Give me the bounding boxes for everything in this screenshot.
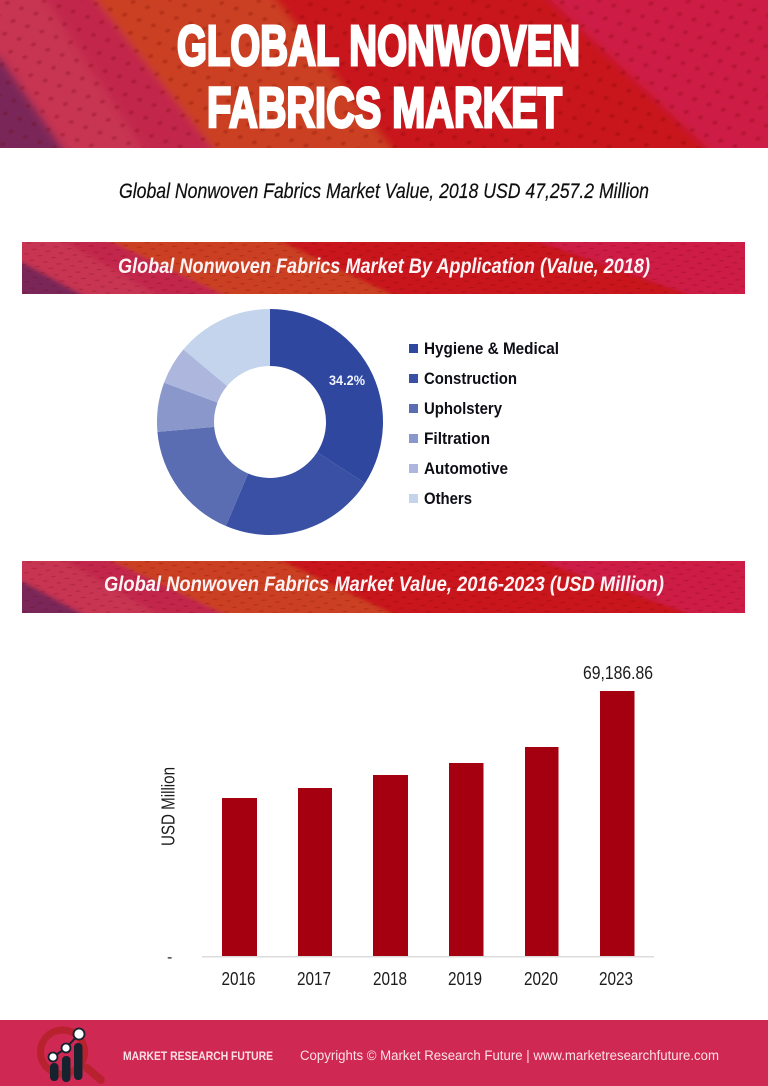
section heading: by application: Global Nonwoven Fabrics Market By Application (Value, 2018) <box>118 255 650 278</box>
title: GLOBAL NONWOVEN <box>177 14 580 78</box>
header banner <box>0 0 768 160</box>
donut legend <box>409 339 559 508</box>
x axis labels: 2018 <box>373 969 407 989</box>
value label: 69,186.86 <box>583 663 653 683</box>
x axis labels: 2023 <box>599 969 633 989</box>
legend: upholstery: Upholstery <box>424 399 502 418</box>
x axis labels: 2019 <box>448 969 482 989</box>
segment: construction <box>226 452 365 535</box>
legend: others: Others <box>424 489 472 508</box>
segment: filtration <box>157 383 218 432</box>
title: FABRICS MARKET <box>207 76 562 140</box>
footer bar <box>0 1020 768 1086</box>
footer brand name: MARKET RESEARCH FUTURE <box>123 1051 273 1063</box>
segment: hygiene and medical <box>270 309 383 483</box>
bars <box>222 691 634 956</box>
x axis labels: 2017 <box>297 969 331 989</box>
segment: others <box>183 309 270 386</box>
x axis labels <box>222 969 633 989</box>
data label: 34.2%: 34.2% <box>329 372 365 388</box>
legend: automotive: Automotive <box>424 459 508 478</box>
section banner: by application <box>3 238 766 298</box>
subtitle: market value: Global Nonwoven Fabrics Market Value, 2018 USD 47,257.2 Million <box>119 180 649 203</box>
y axis title: USD Million <box>158 767 178 846</box>
title <box>177 14 580 140</box>
legend: others <box>409 489 472 508</box>
section banner: market value <box>3 557 766 617</box>
segment: automotive <box>164 349 227 402</box>
footer copyright: Copyrights © Market Research Future | www.marketresearchfuture.com <box>300 1048 719 1063</box>
icon: market research future logo <box>40 1028 101 1082</box>
x axis labels: 2020 <box>524 969 558 989</box>
donut chart <box>157 309 383 535</box>
x axis labels: 2016 <box>222 969 256 989</box>
segment: upholstery <box>157 427 248 526</box>
bar chart <box>158 663 654 989</box>
legend: hygiene and medical: Hygiene & Medical <box>424 339 559 358</box>
legend: construction: Construction <box>424 369 517 388</box>
y axis zero tick: - <box>167 949 172 966</box>
section heading: market value: Global Nonwoven Fabrics Market Value, 2016-2023 (USD Million) <box>104 573 664 596</box>
legend: filtration: Filtration <box>424 429 490 448</box>
